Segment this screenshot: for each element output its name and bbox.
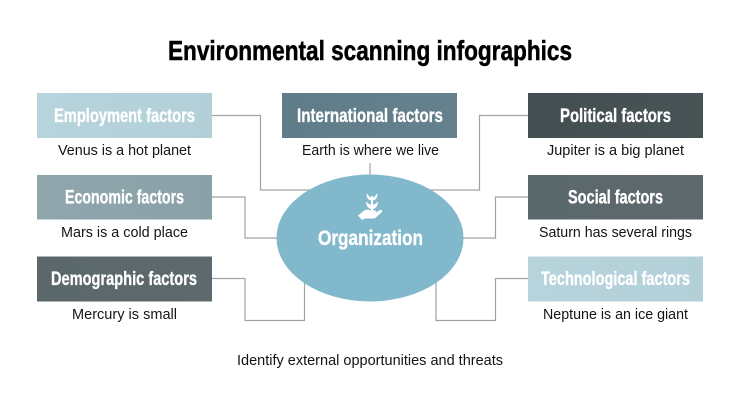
panel: demographic factors: Demographic factors bbox=[51, 269, 197, 290]
panel: demographic factors bbox=[37, 256, 212, 323]
panel: political factors: Political factors bbox=[560, 106, 671, 127]
label: organization: Organization bbox=[318, 227, 423, 250]
panel: employment factors bbox=[37, 93, 212, 159]
panel: technological factors: Neptune is an ice giant bbox=[543, 307, 688, 323]
panel: political factors: Jupiter is a big planet bbox=[547, 143, 684, 159]
panel: international factors: Earth is where we live bbox=[302, 143, 439, 159]
panel: economic factors bbox=[37, 175, 212, 241]
panel: social factors bbox=[528, 175, 703, 241]
panel: economic factors: Economic factors bbox=[65, 188, 184, 208]
panel: technological factors: Technological factors bbox=[541, 269, 690, 290]
icon: hand holding plant bbox=[358, 193, 382, 220]
panel: social factors: Saturn has several rings bbox=[539, 225, 692, 241]
central ellipse: organization bbox=[276, 174, 464, 302]
panel: employment factors: Employment factors bbox=[54, 106, 195, 127]
panel: technological factors bbox=[528, 256, 703, 323]
footer caption: Identify external opportunities and threats bbox=[237, 353, 503, 369]
panel: international factors bbox=[282, 93, 457, 159]
connector lines bbox=[212, 116, 528, 320]
panel: demographic factors: Mercury is small bbox=[72, 307, 177, 323]
panel: social factors: Social factors bbox=[568, 188, 663, 208]
panel: economic factors: Mars is a cold place bbox=[61, 225, 188, 241]
title: Environmental scanning infographics bbox=[168, 35, 572, 66]
panel: employment factors: Venus is a hot planet bbox=[58, 143, 191, 159]
panel: political factors bbox=[528, 93, 703, 159]
panel: international factors: International factors bbox=[297, 106, 443, 127]
